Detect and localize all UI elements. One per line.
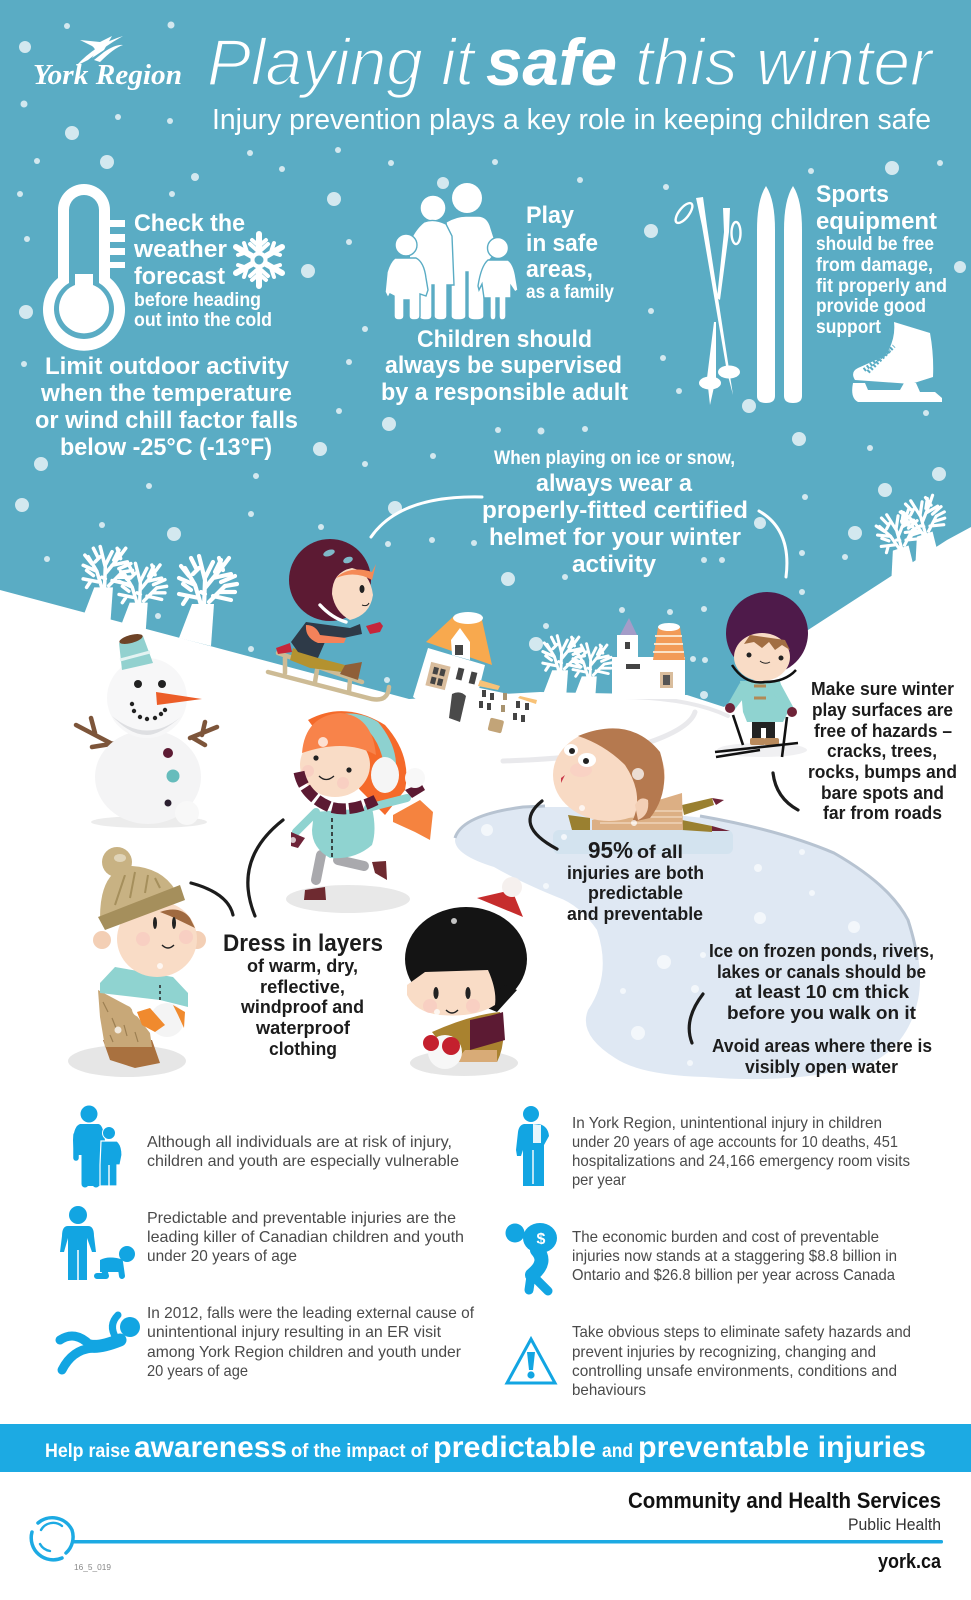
text: check the weather: out into the cold: [134, 310, 272, 331]
text: york region statistics: In York Region, unintentional injury in children: [572, 1115, 882, 1132]
face: [407, 970, 495, 1016]
text: play surfaces: [808, 679, 957, 823]
ski and poles: [715, 715, 798, 757]
text: leading killer: Predictable and preventable injuries are the: [147, 1210, 456, 1227]
text: ice thickness: before you walk on it: [727, 1003, 916, 1023]
hair: [405, 907, 527, 1011]
icon: person carrying money bag: [506, 1223, 557, 1291]
text: ice thickness: Ice on frozen ponds, rivers,: [709, 941, 934, 961]
text: play surfaces: Make sure winter: [811, 679, 954, 699]
icon: adult and child: [73, 1106, 122, 1186]
text: economic burden: The economic burden and cost of preventable: [572, 1229, 879, 1246]
text: 95% statistic: predictable: [588, 883, 683, 903]
text: children should be supervised: by a responsible adult: [381, 379, 628, 406]
text: children should be supervised: always be supervised: [385, 352, 622, 379]
text: falls: unintentional injury resulting in an ER visit: [147, 1324, 442, 1341]
fact 5: [506, 1223, 897, 1291]
icon: family: [385, 183, 518, 320]
trees on the hill: [83, 492, 959, 705]
face: [734, 633, 790, 681]
text: play surfaces: cracks, trees,: [827, 741, 937, 761]
text: eliminate hazards: Take obvious steps to eliminate safety hazards and: [572, 1324, 911, 1341]
text: ice thickness: visibly open water: [745, 1057, 898, 1077]
eyes: [564, 744, 578, 756]
dots on ice: [481, 824, 860, 1066]
text: helmet message: [482, 448, 748, 578]
text: eliminate hazards: controlling unsafe environments, conditions and: [572, 1363, 897, 1380]
text: falls: [147, 1305, 475, 1380]
footer: [31, 1488, 943, 1573]
pants and boots: [752, 722, 775, 738]
snowball and mittens: [428, 1035, 462, 1069]
bucket hat: [119, 636, 153, 670]
banner text: predictable: [433, 1431, 596, 1464]
panel: weather: [35, 184, 298, 461]
arrow: play surfaces: [773, 773, 798, 810]
illustration: girl throwing snowball: [286, 711, 433, 913]
icon: injured person: [516, 1106, 549, 1186]
text: vulnerable: children and youth are especially vulnerable: [147, 1153, 459, 1170]
legs and boots: [290, 648, 345, 672]
text: helmet message: When playing on ice or snow,: [494, 448, 735, 469]
text: eliminate hazards: prevent injuries by recognizing, changing and: [572, 1344, 876, 1361]
text: 95% statistic: injuries are both: [567, 863, 704, 883]
banner text: and: [602, 1441, 633, 1462]
arrow: 95%: [530, 801, 557, 849]
subtitle: Injury prevention plays a key role in keeping children safe: [212, 104, 931, 136]
arrows: dress in layers: [191, 820, 283, 916]
text: dress in layers: of warm, dry,: [247, 956, 358, 976]
text: 95% statistic: 95%: [588, 837, 633, 863]
icon: falling person: [60, 1315, 140, 1370]
banner text: [45, 1431, 926, 1464]
snowy hillside: [0, 527, 971, 1600]
illustration: skier: [715, 592, 808, 757]
buttons: [163, 748, 173, 758]
text: play in safe areas: in safe: [526, 230, 598, 257]
text: play surfaces: free of hazards –: [814, 721, 952, 741]
banner text: awareness: [134, 1431, 287, 1464]
text: play in safe areas: [526, 202, 614, 303]
text: ice thickness: [709, 941, 934, 1077]
arrow: ice: [689, 994, 703, 1043]
text: 95% statistic: [567, 837, 704, 924]
text: play surfaces: rocks, bumps and: [808, 762, 957, 782]
title: safe: [486, 25, 617, 99]
illustration: frozen pond: [455, 806, 920, 1079]
mittens: [725, 703, 735, 713]
text: sports equipment: [816, 181, 947, 338]
text: york region statistics: per year: [572, 1172, 627, 1189]
text: play in safe areas: areas,: [526, 256, 593, 283]
panel: sports equipment: [673, 181, 947, 405]
text: dress in layers: waterproof: [255, 1018, 351, 1038]
text: dress in layers: [223, 930, 383, 1059]
print code: 16_5_019: [74, 1563, 112, 1572]
text: dress in layers: Dress in layers: [223, 930, 383, 957]
illustration: castle: [612, 618, 685, 699]
text: york region statistics: [572, 1115, 910, 1189]
text: ice thickness: Avoid areas where there is: [712, 1036, 932, 1056]
text: leading killer: [147, 1210, 464, 1265]
text: limit outdoor activity: below -25°C (-13°F): [60, 434, 272, 461]
text: helmet message: properly-fitted certified: [482, 497, 748, 524]
banner text: of the impact of: [291, 1441, 429, 1462]
text: york region statistics: under 20 years of age accounts for 10 deaths, 451: [572, 1134, 898, 1151]
text: sports equipment: should be free: [816, 234, 934, 255]
icon: thermometer: [43, 184, 125, 351]
mitten: [568, 815, 590, 830]
illustration: path in snow: [503, 697, 728, 761]
text: limit outdoor activity: Limit outdoor activity: [45, 353, 290, 380]
carrot nose: [156, 692, 202, 705]
face: [93, 931, 111, 949]
fact 4: [516, 1106, 910, 1189]
pants: [98, 990, 152, 1047]
text: sports equipment: from damage,: [816, 255, 933, 276]
mitten: [366, 622, 383, 634]
text: 95% statistic: and preventable: [567, 904, 703, 924]
text: dress in layers: clothing: [269, 1039, 337, 1059]
earmuff: [371, 757, 399, 793]
text: economic burden: [572, 1229, 897, 1284]
coat: [740, 681, 788, 722]
logo: York Region: York Region: [33, 59, 182, 91]
arrow: helmet left: [371, 497, 482, 537]
text: eliminate hazards: behaviours: [572, 1382, 646, 1399]
scarf: [306, 625, 346, 643]
fact 3: [60, 1305, 475, 1380]
icon: warning triangle: [507, 1339, 555, 1383]
icon: bird swoosh: [76, 36, 123, 66]
footer rule: [72, 1540, 943, 1544]
icon: adult and crawling baby: [60, 1206, 135, 1280]
icon: ice skate: [852, 322, 942, 402]
text: sports equipment: support: [816, 317, 882, 338]
banner text: preventable injuries: [638, 1431, 926, 1464]
text: check the weather: forecast: [134, 263, 225, 290]
illustration: houses: [413, 612, 537, 733]
text: limit outdoor activity: [35, 353, 298, 461]
text: limit outdoor activity: when the temperature: [40, 380, 292, 407]
panel: safe areas: [381, 183, 628, 406]
striped body: [592, 793, 683, 830]
snowball and mittens: [150, 1003, 184, 1037]
torso: [291, 622, 362, 658]
icon: snowflake: [236, 234, 282, 286]
snowfall dots on sky: [15, 22, 966, 699]
illustration: child on sled: [268, 539, 389, 700]
body: [432, 1012, 503, 1062]
text: helmet message: helmet for your winter: [489, 524, 741, 551]
text: sports equipment: fit properly and: [816, 276, 947, 297]
text: dress in layers: windproof and: [240, 997, 364, 1017]
banner: [0, 1424, 971, 1472]
illustration: snowman: [76, 632, 217, 828]
head: [553, 729, 665, 821]
fact 1: [73, 1106, 459, 1186]
text: sports equipment: Sports: [816, 181, 889, 208]
text: york region statistics: hospitalizations and 24,166 emergency room visits: [572, 1153, 910, 1170]
fact 2: [60, 1206, 464, 1280]
text: play in safe areas: Play: [526, 202, 575, 229]
text: vulnerable: [147, 1134, 459, 1170]
eyes: [134, 680, 142, 688]
text: falls: In 2012, falls were the leading external cause of: [147, 1305, 475, 1322]
text: falls: among York Region children and youth under: [147, 1344, 462, 1361]
logo: swirl: [31, 1518, 73, 1560]
icon: ski poles: [673, 197, 740, 405]
face: [300, 733, 370, 797]
coal smile: [130, 702, 167, 721]
boots: [103, 1040, 160, 1068]
text: vulnerable: Although all individuals are at risk of injury,: [147, 1134, 452, 1151]
text: leading killer: leading killer of Canadian children and youth: [147, 1229, 464, 1246]
face: [332, 568, 373, 620]
illustration: boy in knit hat: [68, 847, 206, 1077]
text: eliminate hazards: [572, 1324, 911, 1399]
mitten: [291, 832, 305, 848]
snowflakes over characters: [114, 737, 644, 1034]
orange hair tail: [393, 800, 433, 840]
scarf: [299, 772, 376, 809]
logo: York Region: [33, 36, 182, 91]
illustration: child with santa hat: [405, 877, 527, 1076]
text: helmet message: always wear a: [536, 470, 693, 497]
illustration: boy falling on ice: [553, 728, 730, 832]
legs and shoes: [682, 798, 714, 832]
footer department: Public Health: [848, 1515, 941, 1534]
title: [207, 25, 935, 99]
text: play surfaces: far from roads: [823, 803, 942, 823]
text: sports equipment: equipment: [816, 208, 937, 235]
stick arms: [76, 718, 217, 747]
coat: [100, 967, 188, 1007]
text: check the weather: before heading: [134, 290, 261, 311]
arrow: helmet right: [759, 511, 787, 577]
icon: person carrying money bag: $: [537, 1231, 546, 1248]
text: check the weather: weather: [133, 236, 227, 263]
text: play surfaces: bare spots and: [821, 783, 944, 803]
helmet: [726, 592, 808, 674]
legs: [316, 855, 364, 880]
text: children should be supervised: [381, 326, 628, 406]
coat: [312, 808, 374, 858]
footer department: [628, 1488, 942, 1573]
text: ice thickness: lakes or canals should be: [717, 962, 926, 982]
title: this winter: [635, 25, 935, 99]
title: Playing it: [207, 25, 477, 99]
text: leading killer: under 20 years of age: [147, 1248, 297, 1265]
helmet callout: [371, 448, 787, 578]
text: check the weather: [133, 210, 272, 331]
text: 95% statistic: of all: [637, 842, 683, 862]
text: play in safe areas: as a family: [526, 282, 614, 303]
text: sports equipment: provide good: [816, 296, 926, 317]
text: falls: 20 years of age: [147, 1363, 248, 1380]
sled: [268, 653, 389, 700]
teal hood: [318, 714, 396, 768]
text: ice thickness: at least 10 cm thick: [735, 982, 910, 1002]
fact 6: [507, 1324, 911, 1399]
footer department: Community and Health Services: [628, 1488, 941, 1513]
background: winter sky: [0, 0, 971, 760]
santa hat: [477, 890, 523, 917]
footer department: york.ca: [878, 1551, 942, 1573]
text: economic burden: Ontario and $26.8 billion per year across Canada: [572, 1267, 895, 1284]
text: dress in layers: reflective,: [260, 977, 345, 997]
icon: skis: [757, 186, 802, 403]
knit hat: [100, 866, 178, 918]
boots: [304, 861, 387, 900]
text: helmet message: activity: [572, 551, 657, 578]
banner text: Help raise: [45, 1441, 130, 1462]
helmet: [289, 539, 371, 621]
text: children should be supervised: Children should: [417, 326, 592, 353]
text: economic burden: injuries now stands at a staggering $8.8 billion in: [572, 1248, 897, 1265]
text: check the weather: Check the: [134, 210, 245, 237]
text: limit outdoor activity: or wind chill factor falls: [35, 407, 298, 434]
text: play surfaces: play surfaces are: [812, 700, 953, 720]
snowball: [405, 783, 425, 798]
